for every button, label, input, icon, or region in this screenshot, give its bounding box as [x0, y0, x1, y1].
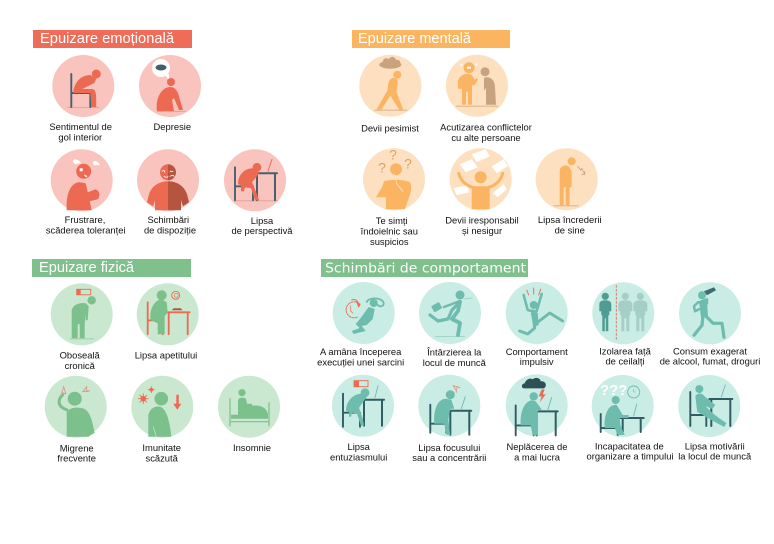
panel: Epuizare emoțională — [33, 30, 293, 236]
icon: person walking under cloud — [374, 57, 407, 111]
item: Izolarea față de ceilalți — [592, 282, 654, 366]
label: gol interior — [58, 132, 102, 142]
icon: person slumped on chair — [67, 70, 101, 108]
label: Te simți — [376, 215, 408, 226]
icon: person slumped at desk — [234, 159, 278, 201]
icon: two people in conflict — [456, 62, 498, 107]
label: Neplăcerea de — [507, 441, 567, 452]
label: Incapacitatea de — [595, 440, 664, 451]
item: Acutizarea conflictelor — [440, 55, 532, 143]
item: Lipsa focusului — [412, 375, 486, 463]
icon: person awake in bed with moon — [230, 385, 269, 426]
label: cu alte persoane — [451, 132, 521, 143]
icon: person unfocused at desk — [430, 386, 471, 435]
heading: Epuizare fizică: Epuizare fizică — [39, 260, 135, 276]
item: Lipsa apetitului — [135, 283, 199, 361]
label: sau a concentrării — [412, 452, 486, 463]
item: Întârzierea la locul de muncă — [419, 282, 487, 368]
icon: isolated person and two others — [599, 285, 647, 341]
label: Sentimentul de — [49, 121, 112, 132]
icon: doubtful person with question marks: ? — [404, 155, 412, 171]
icon: jumping person with arms up — [520, 288, 563, 334]
label: de ceilalți — [605, 355, 645, 366]
label: scăderea toleranței — [46, 225, 126, 236]
label: Comportament — [506, 346, 568, 357]
label: de alcool, fumat, droguri — [660, 355, 760, 366]
label: entuziasmului — [330, 452, 387, 463]
label: Acutizarea conflictelor — [440, 122, 532, 132]
label: suspicios — [370, 236, 409, 247]
icon: person running late with briefcase — [430, 290, 472, 337]
panel: Epuizare fizică — [32, 259, 280, 464]
label: Insomnie — [233, 442, 271, 453]
heading: Epuizare emoțională: Epuizare emoțională — [40, 31, 175, 47]
icon: person with viruses and down arrow — [138, 387, 181, 437]
label: Devii pesimist — [361, 122, 419, 134]
heading: Epuizare mentală: Epuizare mentală — [358, 31, 472, 47]
label: execuției unei sarcini — [317, 356, 404, 367]
item: Te simți îndoielnic — [360, 146, 425, 247]
item: Depresie — [139, 55, 201, 132]
label: Schimbări — [147, 214, 189, 225]
item: Lipsa entuziasmului — [330, 375, 394, 463]
label: locul de muncă — [423, 357, 487, 368]
label: cronică — [65, 360, 96, 371]
label: Întârzierea la — [426, 347, 482, 358]
item: Imunitate scăzută — [131, 376, 193, 464]
icon: person under storm cloud at desk — [516, 378, 558, 435]
item: Lipsa motivării — [678, 375, 752, 462]
label: de perspectivă — [232, 225, 293, 236]
item: Insomnie — [218, 376, 280, 453]
icon: doubtful person with question marks: ? — [389, 146, 397, 162]
label: Lipsa apetitului — [135, 350, 197, 361]
item: Neplăcerea de a mai lucra — [506, 374, 568, 463]
heading: Epuizare fizică — [32, 259, 191, 277]
label: îndoielnic sau — [360, 226, 418, 237]
icon: person with arms up and flying papers — [454, 149, 508, 209]
label: de dispoziție — [144, 225, 196, 236]
icon: person hugging knees with dark thought — [152, 59, 186, 112]
item: Devii pesimist — [359, 55, 421, 134]
label: Lipsa încrederii — [538, 214, 601, 225]
label: Lipsa — [251, 215, 274, 226]
label: Lipsa motivării — [685, 440, 745, 451]
label: organizare a timpului — [586, 450, 674, 462]
item: Devii iresponsabil — [445, 148, 519, 236]
icon: doubtful person with question marks: ? — [378, 159, 386, 175]
icon: lounging person with clock — [346, 298, 384, 334]
label: Depresie — [154, 121, 191, 132]
item: A amâna începerea — [317, 282, 404, 367]
item: Comportament impulsiv — [506, 282, 568, 367]
item: Oboseală cronică — [51, 283, 113, 371]
item: Sentimentul de gol interior — [49, 55, 114, 142]
label: a mai lucra — [514, 452, 561, 463]
label: și nesigur — [462, 225, 502, 236]
item: Frustrare — [46, 149, 126, 236]
icon: person at table without appetite — [148, 290, 190, 334]
panel: Schimbări de comportament — [317, 259, 760, 463]
label: A amâna începerea — [320, 346, 402, 357]
label: Consum exagerat — [673, 345, 747, 356]
label: Migrene — [60, 443, 94, 454]
label: Lipsa — [347, 441, 371, 452]
item: Lipsa încrederii de sine — [536, 148, 601, 236]
icon: tired bent person with low battery — [70, 289, 96, 339]
heading: Epuizare mentală — [352, 30, 510, 48]
label: Oboseală — [60, 349, 101, 360]
icon: half happy half sad person — [147, 164, 189, 210]
icon: hunched person with down arrow — [554, 157, 585, 206]
label: de sine — [555, 225, 585, 236]
label: Imunitate — [142, 442, 181, 453]
icon: angry person — [67, 159, 100, 210]
label: Frustrare, — [65, 214, 105, 225]
label: Lipsa focusului — [418, 442, 480, 453]
heading: Schimbări de comportament: Schimbări de comportament — [325, 260, 526, 276]
icon: doubtful person with question marks — [376, 146, 412, 209]
label: Devii iresponsabil — [445, 214, 519, 225]
item: Schimbări de dispoziție — [137, 149, 199, 236]
item: Consum exagerat — [660, 282, 760, 366]
icon: person leaning back at desk — [690, 385, 732, 427]
label: Izolarea față — [599, 345, 652, 356]
item: Incapacitatea de organizare a timpului — [586, 375, 674, 462]
panel: Epuizare mentală — [352, 30, 601, 247]
icon: person drinking from bottle — [694, 287, 724, 337]
label: scăzută — [146, 453, 179, 464]
icon: person at desk with question marks and clock: ??? — [600, 382, 627, 399]
item: Lipsa de perspectivă — [224, 149, 293, 236]
label: frecvente — [57, 453, 96, 464]
icon: person with headache — [59, 387, 95, 437]
label: impulsiv — [520, 356, 554, 367]
icon: person slumped with low battery — [343, 381, 384, 427]
item: Migrene frecvente — [45, 376, 107, 464]
label: la locul de muncă — [678, 450, 752, 462]
